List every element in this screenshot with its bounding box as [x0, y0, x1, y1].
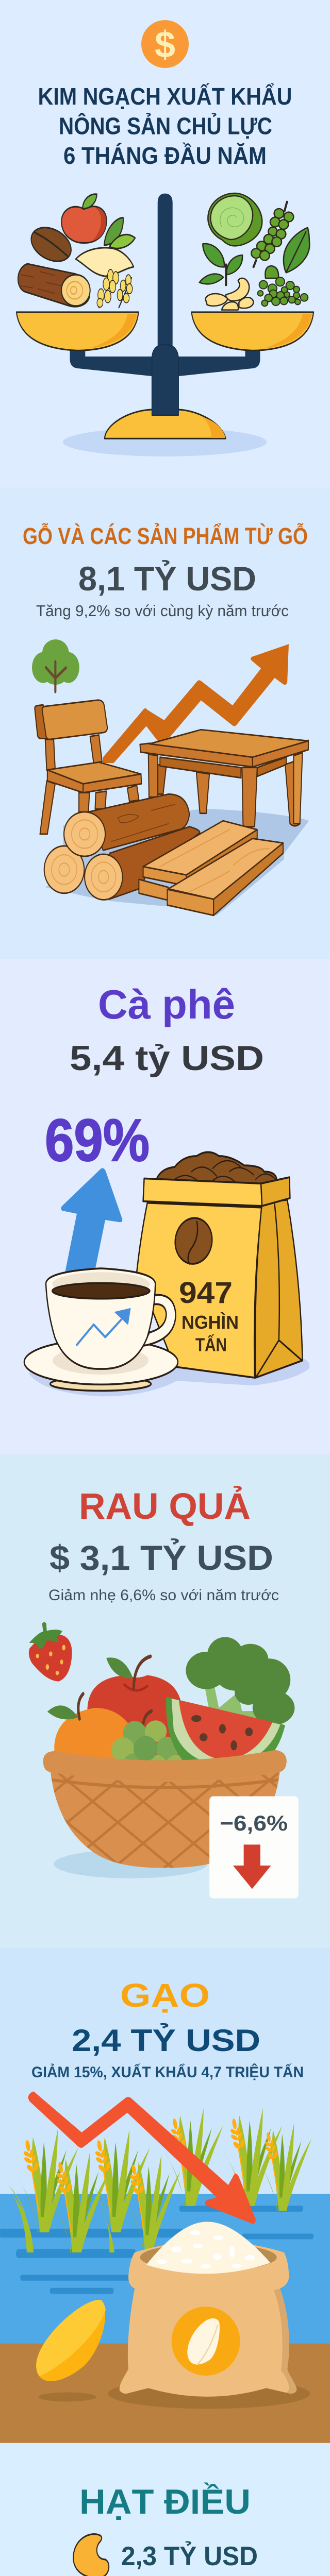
illustration: furniture, logs and growth arrow [32, 639, 309, 916]
text: decline: Giảm nhẹ 6,6% so với năm trước [48, 1587, 279, 1604]
heading: rice: GẠO [120, 1977, 210, 2014]
callout: minus 6.6 percent: −6,6% [220, 1811, 288, 1835]
logs [44, 794, 200, 900]
title: 6 THÁNG ĐẦU NĂM [63, 142, 267, 169]
table [140, 730, 308, 827]
value: 5.4 billion: 5,4 tỷ USD [70, 1039, 264, 1078]
illustration: cashew tree and bar chart [26, 2534, 307, 2576]
heading: fruit and vegetables: RAU QUẢ [79, 1486, 251, 1527]
arrow: growth [103, 644, 289, 763]
broccoli [186, 1637, 294, 1725]
icon: tree [32, 639, 79, 692]
icon: cashew nut [73, 2534, 109, 2576]
illustration: cup, arrow and coffee bag [24, 1152, 309, 1396]
panel: wood products [0, 488, 330, 959]
basket [43, 1750, 287, 1868]
watermelon [166, 1697, 285, 1766]
value: 2.4 billion: 2,4 TỶ USD [72, 2023, 260, 2058]
arrow: up [61, 1168, 122, 1272]
text: rice decline: GIẢM 15%, XUẤT KHẨU 4,7 TRIỆU TẤN [31, 2063, 304, 2081]
text: 947 thousand tonnes on bag: NGHÌN [182, 1312, 239, 1333]
stat: 69 percent: 69% [45, 1107, 150, 1174]
panel: coffee [0, 959, 330, 1454]
heading: coffee: Cà phê [98, 981, 235, 1027]
arrow: decline [28, 2091, 256, 2224]
rice plants [8, 2108, 311, 2252]
value: 3.1 billion: $ 3,1 TỶ USD [50, 1538, 273, 1578]
panel: cashew [0, 2443, 330, 2576]
panel: rice [0, 1948, 330, 2443]
coffee cup and saucer [24, 1268, 178, 1391]
illustration: falling arrow and rice sack [28, 2091, 310, 2409]
icon: dollar coin [141, 20, 189, 68]
strawberry [29, 1622, 72, 1682]
panel: header [0, 0, 330, 488]
apple [87, 1656, 182, 1767]
value: 2.3 billion: 2,3 TỶ USD [121, 2541, 258, 2571]
rice sack [108, 2222, 310, 2409]
callout box [209, 1796, 299, 1899]
title: NÔNG SẢN CHỦ LỰC [59, 112, 272, 139]
text: wood growth: Tăng 9,2% so với cùng kỳ năm trước [36, 602, 289, 620]
text: 947 thousand tonnes on bag: 947 [179, 1276, 233, 1310]
arrow: down [233, 1844, 271, 1889]
water and field [0, 2194, 330, 2443]
right pan goods [200, 193, 309, 310]
panel: fruit and vegetables [29, 1486, 299, 1898]
title: KIM NGẠCH XUẤT KHẨU [38, 83, 292, 110]
left pan goods [18, 194, 135, 308]
planks [139, 821, 283, 916]
illustration: fruit basket [29, 1622, 299, 1899]
grapes [111, 1711, 187, 1775]
coffee bag [137, 1152, 303, 1378]
text: 947 thousand tonnes on bag [179, 1276, 239, 1355]
title [38, 83, 292, 169]
chair [35, 700, 141, 834]
text: 947 thousand tonnes on bag: TẤN [195, 1334, 227, 1355]
heading: cashew: HẠT ĐIỀU [79, 2482, 251, 2521]
value: 8.1 billion: 8,1 TỶ USD [78, 560, 256, 598]
rice grain [36, 2300, 106, 2401]
orange [47, 1694, 130, 1767]
illustration: balance scale [16, 194, 314, 456]
icon: dollar coin: $ [155, 24, 175, 65]
